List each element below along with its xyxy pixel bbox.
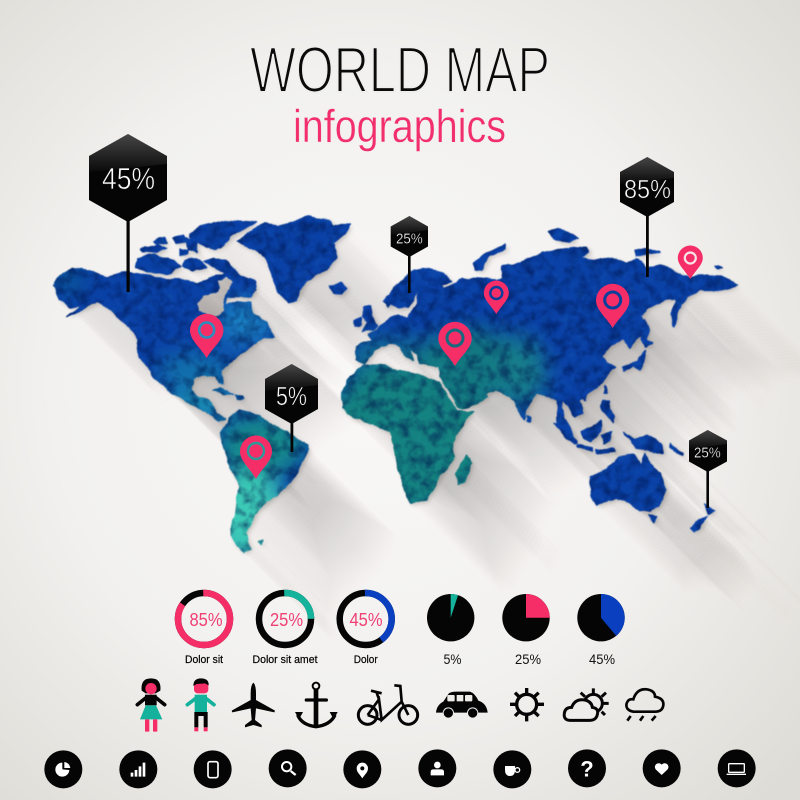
icon: rain cloud [626,689,663,721]
pie chart: 45% [577,594,625,667]
button: heart [643,749,681,787]
button: search [269,749,307,787]
hexagon pin: 5%: 5% [276,381,307,411]
hexagon pin: 25% Oceania: 25% [694,444,721,462]
map pin: Far East [678,246,703,279]
pie chart: 5%: 5% [444,651,462,667]
hexagon pin: 85% [620,157,674,277]
pie chart: 45%: 45% [589,651,615,667]
hexagon pin: 25% Europe [391,216,428,293]
map pin: China [596,284,629,328]
icon: airplane [232,683,275,727]
ring chart: 25%: Dolor sit amet [252,654,318,666]
pie chart: 25%: 25% [515,651,541,667]
icon: girl [137,678,165,732]
icon: sun [510,688,544,721]
pie chart: 5% [427,594,474,667]
map pin: North America [190,314,223,358]
map pin: Middle East [438,322,472,366]
map pin: South America [240,436,272,479]
ring chart: 45%: Dolor [354,654,378,666]
icon: car [436,692,488,719]
button: person [418,749,456,787]
button: location [343,750,381,788]
ring chart: 45%: 45% [350,610,382,630]
pie chart: 25% [502,594,550,667]
hexagon pin: 45% [89,134,167,292]
icon: anchor [295,683,338,727]
ring chart: 85%: 85% [190,610,222,630]
hexagon pin: 25% Europe: 25% [396,230,423,248]
button: coffee cup [493,750,531,788]
title: WORLD MAP [250,33,550,106]
icon: boy [187,678,214,731]
icon: sun behind cloud [564,688,609,720]
button: phone [194,750,232,788]
button: laptop [718,749,756,787]
ring chart: 85%: Dolor sit [185,654,223,666]
button: question mark [568,749,606,787]
icon: bicycle [358,685,418,724]
ring chart: 25% [252,593,318,666]
world map [52,214,739,554]
long map shadow [56,219,800,642]
button: signal bars [119,750,157,788]
button: pie chart [44,750,82,788]
map pin: Russia west [484,280,509,314]
button: question mark: ? [580,756,594,781]
ring chart: 85% [178,593,230,666]
subtitle: infographics [293,100,506,152]
hexagon pin: 45%: 45% [102,161,155,196]
hexagon pin: 25% Oceania [689,430,727,508]
hexagon pin: 5% [265,364,318,452]
ring chart: 45% [340,593,392,666]
ring chart: 25%: 25% [270,610,303,630]
hexagon pin: 85%: 85% [624,174,671,204]
